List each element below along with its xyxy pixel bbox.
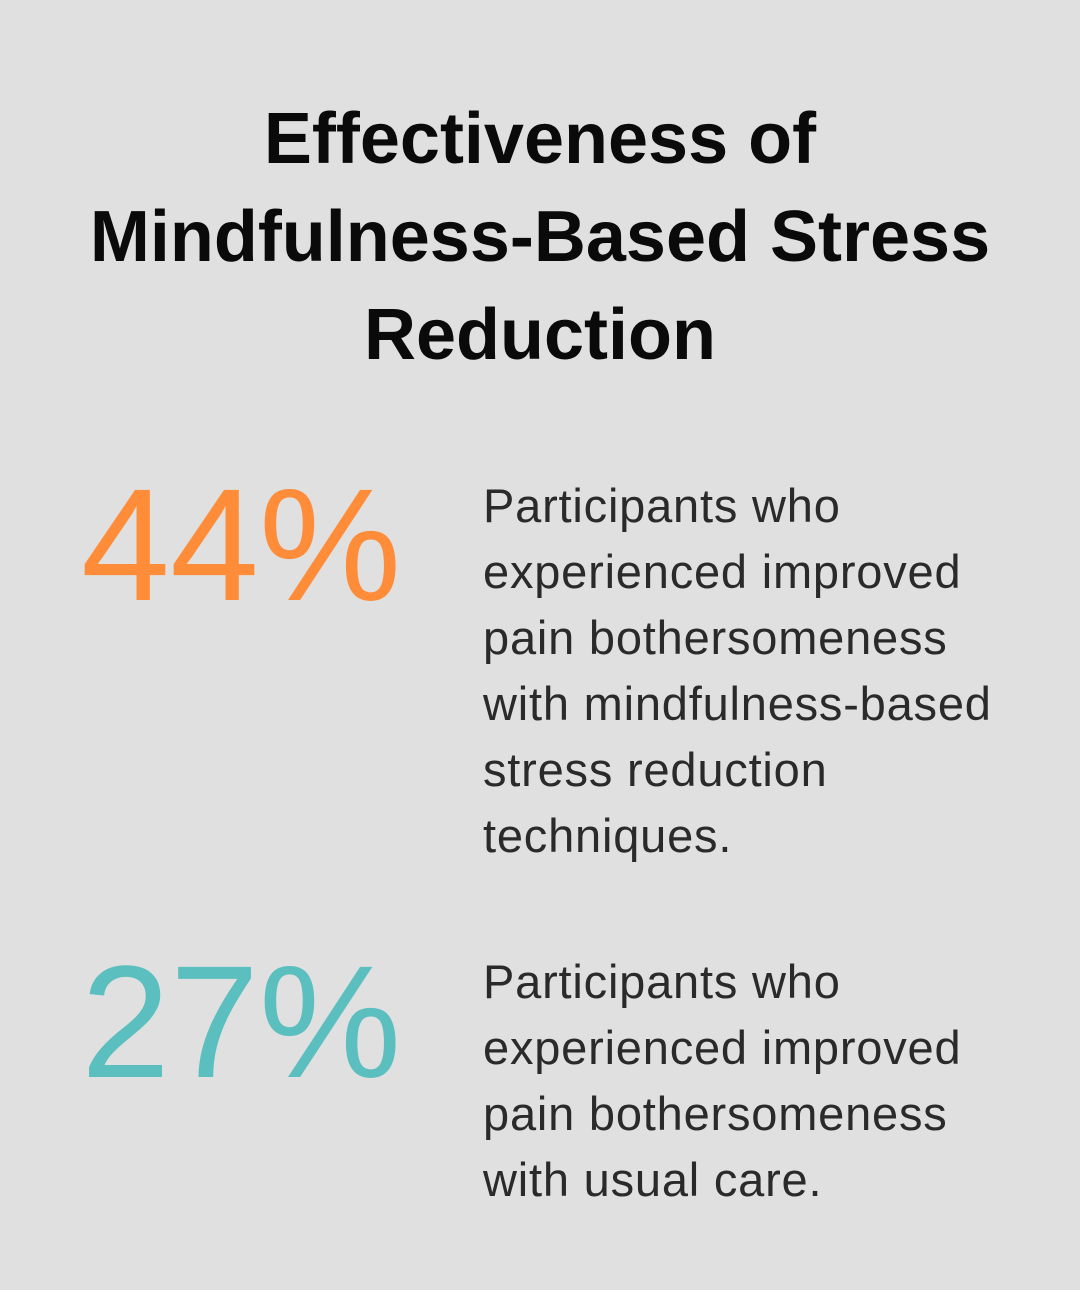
text: MBSR description: stress reduction — [483, 743, 828, 796]
text: MBSR description: techniques. — [483, 809, 732, 862]
text: MBSR description: pain bothersomeness — [483, 611, 948, 664]
text: MBSR description: experienced improved — [483, 545, 961, 598]
title: Mindfulness-Based Stress — [90, 197, 990, 277]
stat: 27%: 27% — [81, 932, 401, 1111]
text: MBSR description — [483, 479, 992, 862]
text: usual care description — [483, 955, 961, 1206]
text: usual care description: experienced improved — [483, 1021, 961, 1074]
title — [90, 99, 990, 375]
title: Reduction — [364, 295, 716, 375]
text: MBSR description: Participants who — [483, 479, 841, 532]
text: usual care description: Participants who — [483, 955, 841, 1008]
text: MBSR description: with mindfulness-based — [483, 677, 992, 730]
stat: 44%: 44% — [81, 455, 401, 634]
text: usual care description: with usual care. — [483, 1153, 822, 1206]
title: Effectiveness of — [264, 99, 816, 179]
text: usual care description: pain bothersomeness — [483, 1087, 948, 1140]
